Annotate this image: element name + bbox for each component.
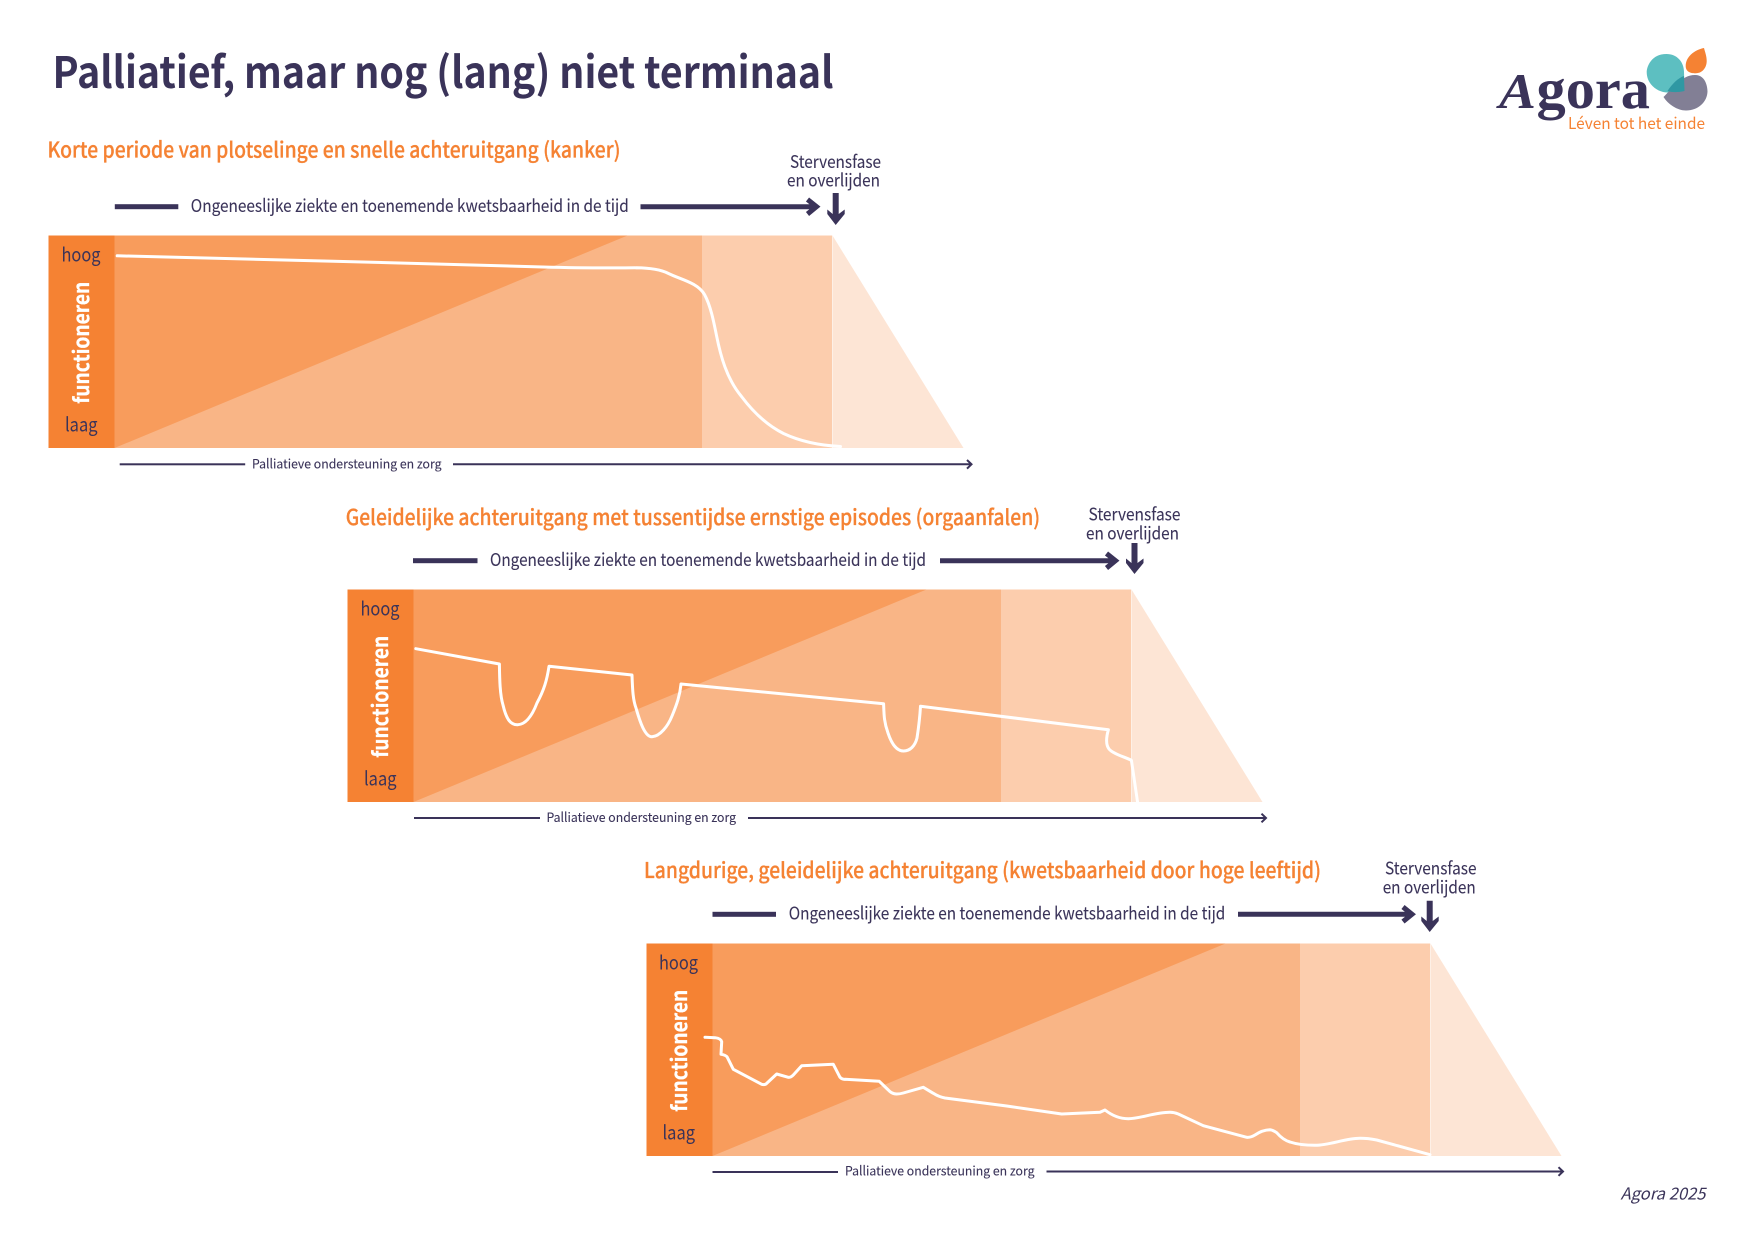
- label: stervensfase: Stervensfase: [1088, 502, 1180, 526]
- heading: hoge leeftijd: Langdurige, geleidelijke achteruitgang (kwetsbaarheid door hoge leeftijd): [644, 854, 1321, 885]
- arrow: palliatieve ondersteuning: Palliatieve ondersteuning en zorg: [546, 807, 737, 826]
- label: laag: laag: [364, 764, 397, 792]
- arrow: palliatieve ondersteuning: Palliatieve ondersteuning en zorg: [252, 454, 442, 472]
- label: stervensfase: en overlijden: [1086, 520, 1179, 546]
- label: laag: laag: [65, 410, 98, 438]
- label: hoog: hoog: [659, 948, 698, 976]
- logo: Agora: Léven tot het einde: [1568, 110, 1705, 134]
- logo: Agora: [1496, 48, 1708, 134]
- logo: Agora: A: [1496, 63, 1536, 119]
- panel: korte periode (kanker): [48, 134, 972, 472]
- label: hoog: hoog: [360, 594, 400, 622]
- plot: kanker: [48, 236, 964, 448]
- label: stervensfase: [1086, 502, 1180, 546]
- arrow: palliatieve ondersteuning: [120, 454, 971, 472]
- axis label: functioneren: functioneren: [664, 990, 694, 1112]
- plot: hoge leeftijd: [646, 944, 1562, 1156]
- panel: langdurige achteruitgang (hoge leeftijd): [644, 854, 1563, 1180]
- axis label: functioneren: functioneren: [66, 282, 96, 404]
- label: stervensfase: Stervensfase: [1385, 856, 1476, 880]
- credit: Agora 2025: Agora 2025: [1620, 1180, 1707, 1204]
- label: hoog: hoog: [62, 240, 101, 268]
- arrow: stervensfase down: [1126, 543, 1144, 574]
- arrow: palliatieve ondersteuning: [414, 807, 1266, 826]
- arrow: stervensfase down: [827, 193, 845, 225]
- panel: geleidelijke achteruitgang (orgaanfalen): [346, 501, 1266, 826]
- label: stervensfase: en overlijden: [1383, 875, 1476, 900]
- label: stervensfase: en overlijden: [787, 168, 880, 193]
- axis label: functioneren: functioneren: [365, 636, 395, 758]
- arrow: ongeneeslijke ziekte: Ongeneeslijke ziekte en toenemende kwetsbaarheid in de tijd: [490, 547, 926, 572]
- curve: functioneren orgaanfalen: [416, 649, 1138, 802]
- plot: orgaanfalen: [348, 590, 1262, 802]
- label: stervensfase: [787, 149, 881, 193]
- title: Palliatief, maar nog (lang) niet terminaal: [52, 38, 834, 101]
- arrow: ongeneeslijke ziekte: Ongeneeslijke ziekte en toenemende kwetsbaarheid in de tijd: [789, 901, 1225, 926]
- arrow: palliatieve ondersteuning: Palliatieve ondersteuning en zorg: [845, 1160, 1035, 1180]
- logo: Agora: gora: [1536, 58, 1650, 121]
- curve: functioneren kanker: [117, 256, 840, 446]
- arrow: palliatieve ondersteuning: [712, 1160, 1563, 1180]
- label: stervensfase: [1383, 856, 1476, 900]
- arrow: ongeneeslijke ziekte: Ongeneeslijke ziekte en toenemende kwetsbaarheid in de tijd: [191, 193, 629, 218]
- heading: kanker: Korte periode van plotselinge en snelle achteruitgang (kanker): [48, 134, 620, 164]
- curve: functioneren hoge leeftijd: [705, 1037, 1430, 1155]
- label: stervensfase: Stervensfase: [790, 149, 881, 174]
- label: laag: laag: [662, 1118, 695, 1146]
- heading: orgaanfalen: Geleidelijke achteruitgang met tussentijdse ernstige episodes (orgaanfalen): [346, 501, 1040, 532]
- arrow: stervensfase down: [1421, 901, 1439, 932]
